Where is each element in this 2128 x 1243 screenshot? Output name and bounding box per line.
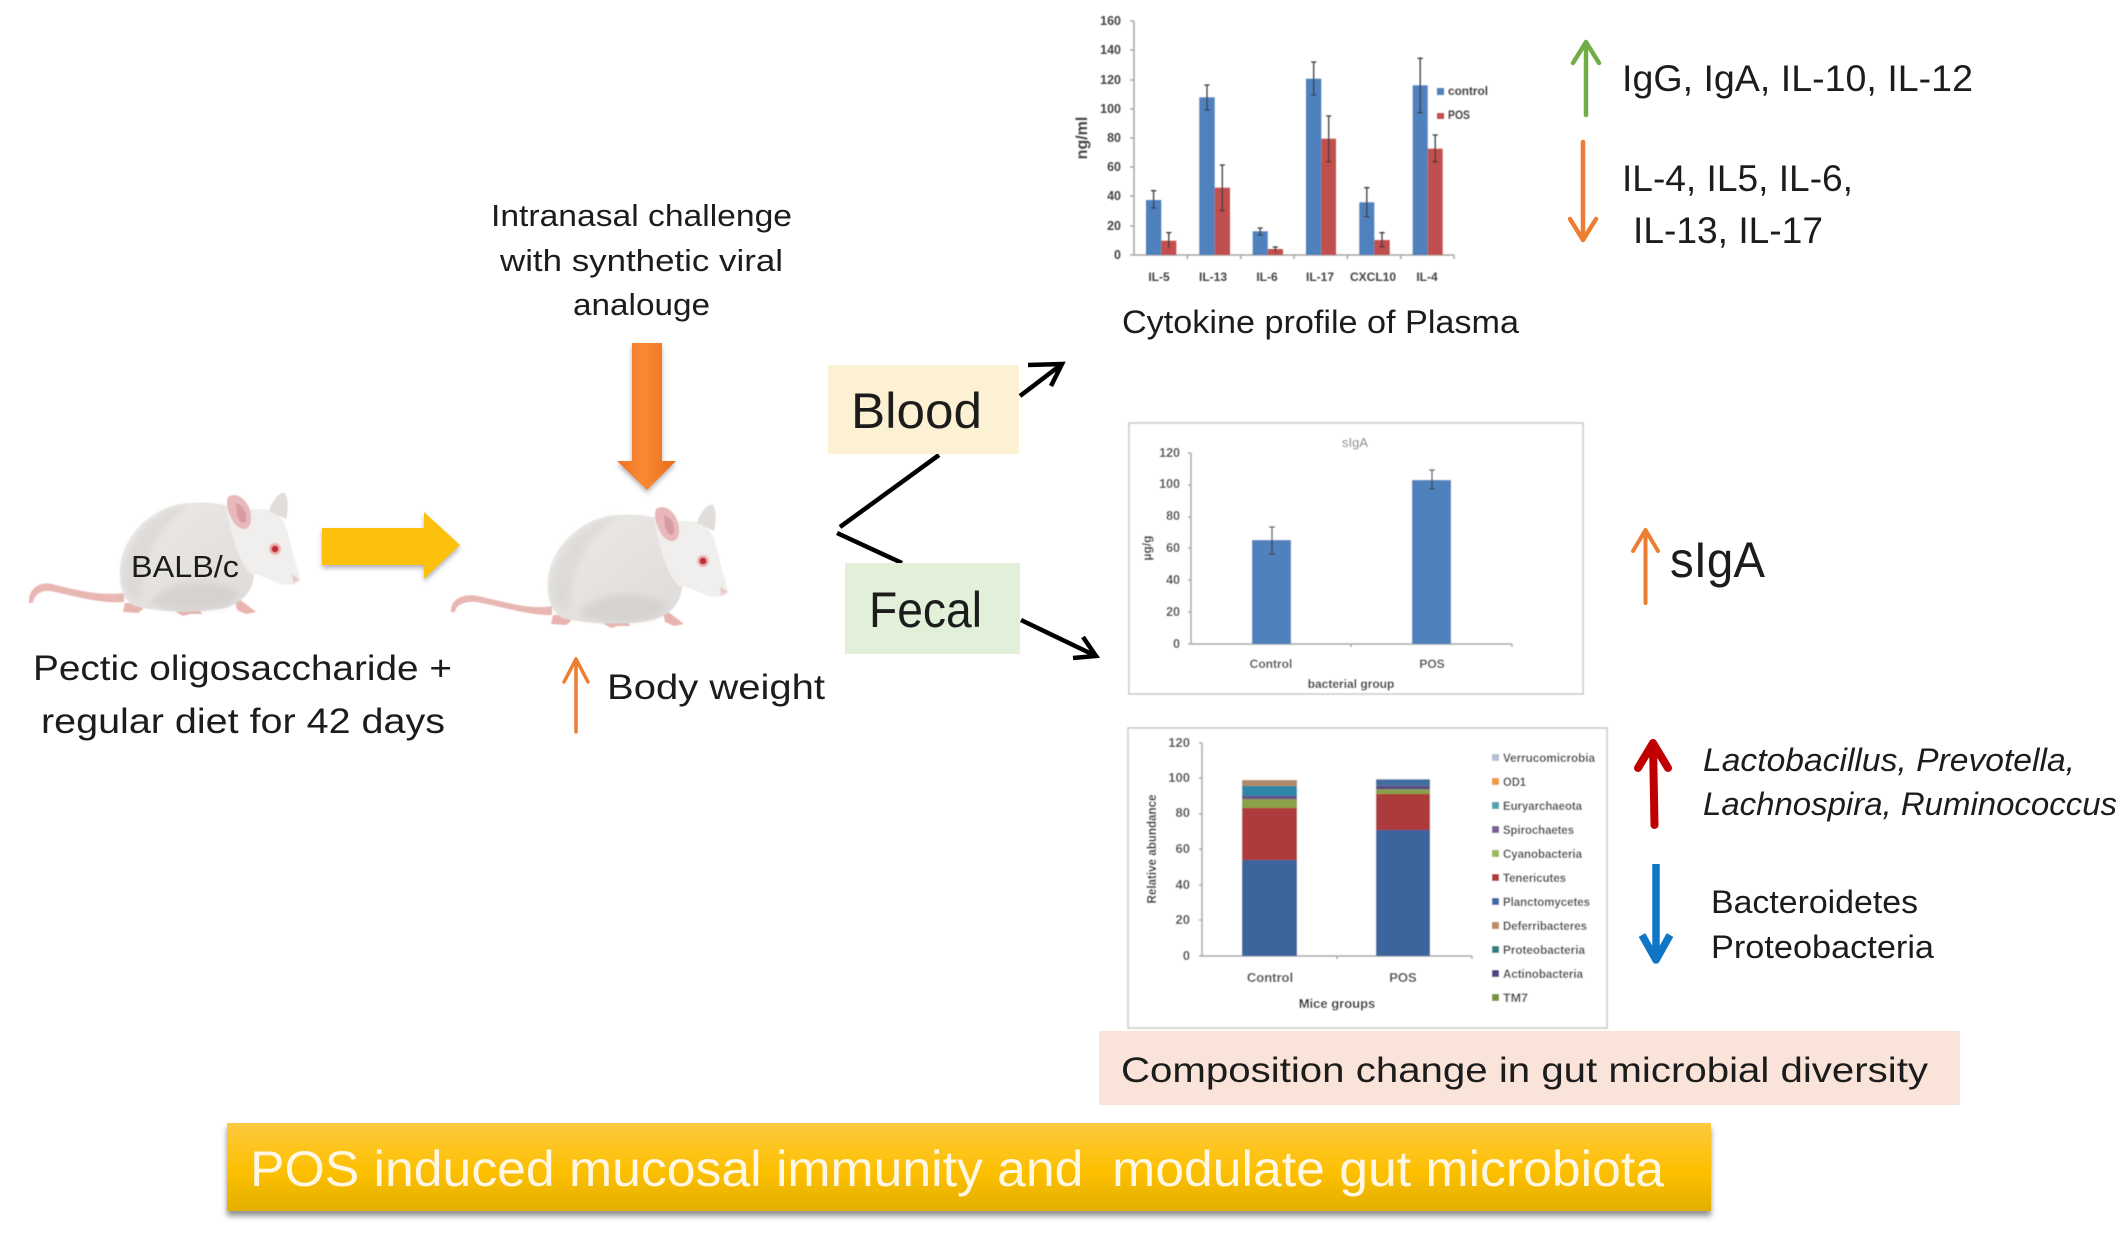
y tick labels <box>1159 446 1180 651</box>
arrow: orange challenge arrow <box>617 343 676 490</box>
x labels: POS <box>1419 657 1445 671</box>
y tick labels: 60 <box>1107 160 1121 174</box>
legend: Actinobacteria <box>1503 967 1583 981</box>
text: decreased phyla: Proteobacteria <box>1711 929 1934 965</box>
text: intranasal challenge <box>491 198 792 322</box>
arrow: blue down <box>1642 864 1670 960</box>
y tick labels: 80 <box>1176 805 1190 820</box>
text: increased genera: Lactobacillus, Prevotella, <box>1703 742 2075 778</box>
legend: TM7 <box>1503 991 1528 1005</box>
legend: OD1 <box>1503 775 1526 789</box>
category labels: IL-13 <box>1199 270 1227 284</box>
text: decreased phyla <box>1711 884 1934 965</box>
legend: Cyanobacteria <box>1503 847 1582 861</box>
control stack <box>1242 780 1297 956</box>
legend: Deferribacteres <box>1503 919 1587 933</box>
label: BALB/c: BALB/c <box>131 549 239 584</box>
x labels: POS <box>1389 970 1417 985</box>
legend: Verrucomicrobia <box>1503 751 1595 765</box>
y tick labels <box>1100 14 1121 262</box>
y tick labels: 60 <box>1176 841 1190 856</box>
category labels: IL-4 <box>1416 270 1438 284</box>
legend: POS <box>1448 108 1470 122</box>
POS bars <box>1161 139 1443 255</box>
text: decreased markers: IL-13, IL-17 <box>1633 210 1823 251</box>
y tick labels: 100 <box>1168 770 1190 785</box>
text: decreased markers <box>1622 158 1853 251</box>
chart: cytokine profile <box>1074 14 1488 284</box>
text: increased markers: IgG, IgA, IL-10, IL-12 <box>1622 58 1973 99</box>
x labels <box>1250 657 1445 691</box>
category labels <box>1148 270 1438 284</box>
y tick labels <box>1168 735 1190 963</box>
y tick labels: 140 <box>1100 43 1121 57</box>
text: diet description: regular diet for 42 days <box>41 702 445 741</box>
text: diet description: Pectic oligosaccharide + <box>33 649 452 688</box>
axes <box>1130 21 1454 259</box>
category labels: IL-17 <box>1306 270 1334 284</box>
box: Fecal: Fecal <box>869 582 982 638</box>
box: composition caption: Composition change in gut microbial diversity <box>1121 1051 1929 1090</box>
y axis title: ng/ml <box>1074 117 1091 159</box>
arrow: sIgA up <box>1633 530 1658 603</box>
y tick labels: 120 <box>1168 735 1190 750</box>
banner: conclusion <box>227 1123 1711 1211</box>
text: diet description <box>33 649 452 741</box>
arrow: blood to cytokine chart <box>1020 364 1062 396</box>
y tick labels: 40 <box>1176 877 1190 892</box>
category labels: IL-5 <box>1148 270 1170 284</box>
frame <box>1129 423 1583 694</box>
y tick labels: 20 <box>1176 912 1190 927</box>
bars <box>1252 480 1451 644</box>
box: Fecal <box>845 563 1020 654</box>
y tick labels: 20 <box>1166 605 1180 619</box>
axes <box>1188 453 1512 647</box>
y tick labels: 120 <box>1100 73 1121 87</box>
arrow: body weight up <box>564 659 588 732</box>
y tick labels: 0 <box>1114 248 1121 262</box>
chart: microbial composition <box>1128 728 1607 1028</box>
text: intranasal challenge: analouge <box>573 287 710 322</box>
category labels: CXCL10 <box>1350 270 1396 284</box>
y tick labels: 40 <box>1166 573 1180 587</box>
legend: Euryarchaeota <box>1503 799 1582 813</box>
y tick labels: 60 <box>1166 541 1180 555</box>
y axis title: Relative abundance <box>1145 794 1159 904</box>
legend: Proteobacteria <box>1503 943 1585 957</box>
text: increased genera <box>1703 742 2117 822</box>
legend: control <box>1448 84 1488 98</box>
x labels: Control <box>1250 657 1292 671</box>
frame <box>1128 728 1607 1028</box>
banner: conclusion: POS induced mucosal immunity and modulate gut microbiota <box>250 1141 1664 1197</box>
chart: sIgA <box>1129 423 1583 694</box>
x labels: Control <box>1247 970 1293 985</box>
y axis title: µg/g <box>1140 536 1154 560</box>
legend <box>1437 84 1488 122</box>
y tick labels: 40 <box>1107 189 1121 203</box>
POS stack <box>1376 779 1430 956</box>
text: intranasal challenge: with synthetic viral <box>499 243 783 278</box>
x labels: Mice groups <box>1299 996 1375 1011</box>
y tick labels: 20 <box>1107 219 1121 233</box>
caption: cytokine profile: Cytokine profile of Plasma <box>1122 304 1519 340</box>
box: Blood <box>828 365 1019 454</box>
y tick labels: 0 <box>1173 637 1180 651</box>
line: branch to fecal <box>837 533 902 563</box>
legend: Planctomycetes <box>1503 895 1590 909</box>
legend <box>1492 751 1595 1005</box>
text: decreased markers: IL-4, IL5, IL-6, <box>1622 158 1853 199</box>
x labels: bacterial group <box>1308 677 1394 691</box>
arrow: red up <box>1638 743 1668 825</box>
error bars <box>1151 58 1438 252</box>
axes <box>1199 743 1472 959</box>
mouse illustration: challenged mouse <box>451 505 728 628</box>
control bars <box>1146 79 1428 255</box>
chart title: sIgA <box>1342 435 1368 450</box>
line: branch to blood <box>840 455 939 527</box>
text: increased genera: Lachnospira, Ruminococcus <box>1703 786 2117 822</box>
category labels: IL-6 <box>1256 270 1278 284</box>
x labels <box>1247 970 1417 1011</box>
y tick labels: 80 <box>1107 131 1121 145</box>
y tick labels: 100 <box>1100 102 1121 116</box>
arrow: green up <box>1573 42 1599 115</box>
y tick labels: 0 <box>1183 948 1190 963</box>
arrow: orange down <box>1570 142 1596 240</box>
y tick labels: 100 <box>1159 477 1180 491</box>
text: intranasal challenge: Intranasal challenge <box>491 198 792 233</box>
y tick labels: 80 <box>1166 509 1180 523</box>
arrow: yellow arrow between mice <box>322 512 460 579</box>
text: decreased phyla: Bacteroidetes <box>1711 884 1918 920</box>
y tick labels: 120 <box>1159 446 1180 460</box>
legend: Tenericutes <box>1503 871 1566 885</box>
legend: Spirochaetes <box>1503 823 1574 837</box>
text: sIgA: sIgA <box>1670 532 1766 588</box>
box: composition caption <box>1099 1031 1960 1105</box>
text: body weight: Body weight <box>607 668 825 707</box>
mouse illustration: BALB/c <box>29 493 300 616</box>
y tick labels: 160 <box>1100 14 1121 28</box>
error bars <box>1269 470 1435 554</box>
box: Blood: Blood <box>851 383 982 439</box>
arrow: fecal to sIgA chart <box>1021 620 1096 658</box>
